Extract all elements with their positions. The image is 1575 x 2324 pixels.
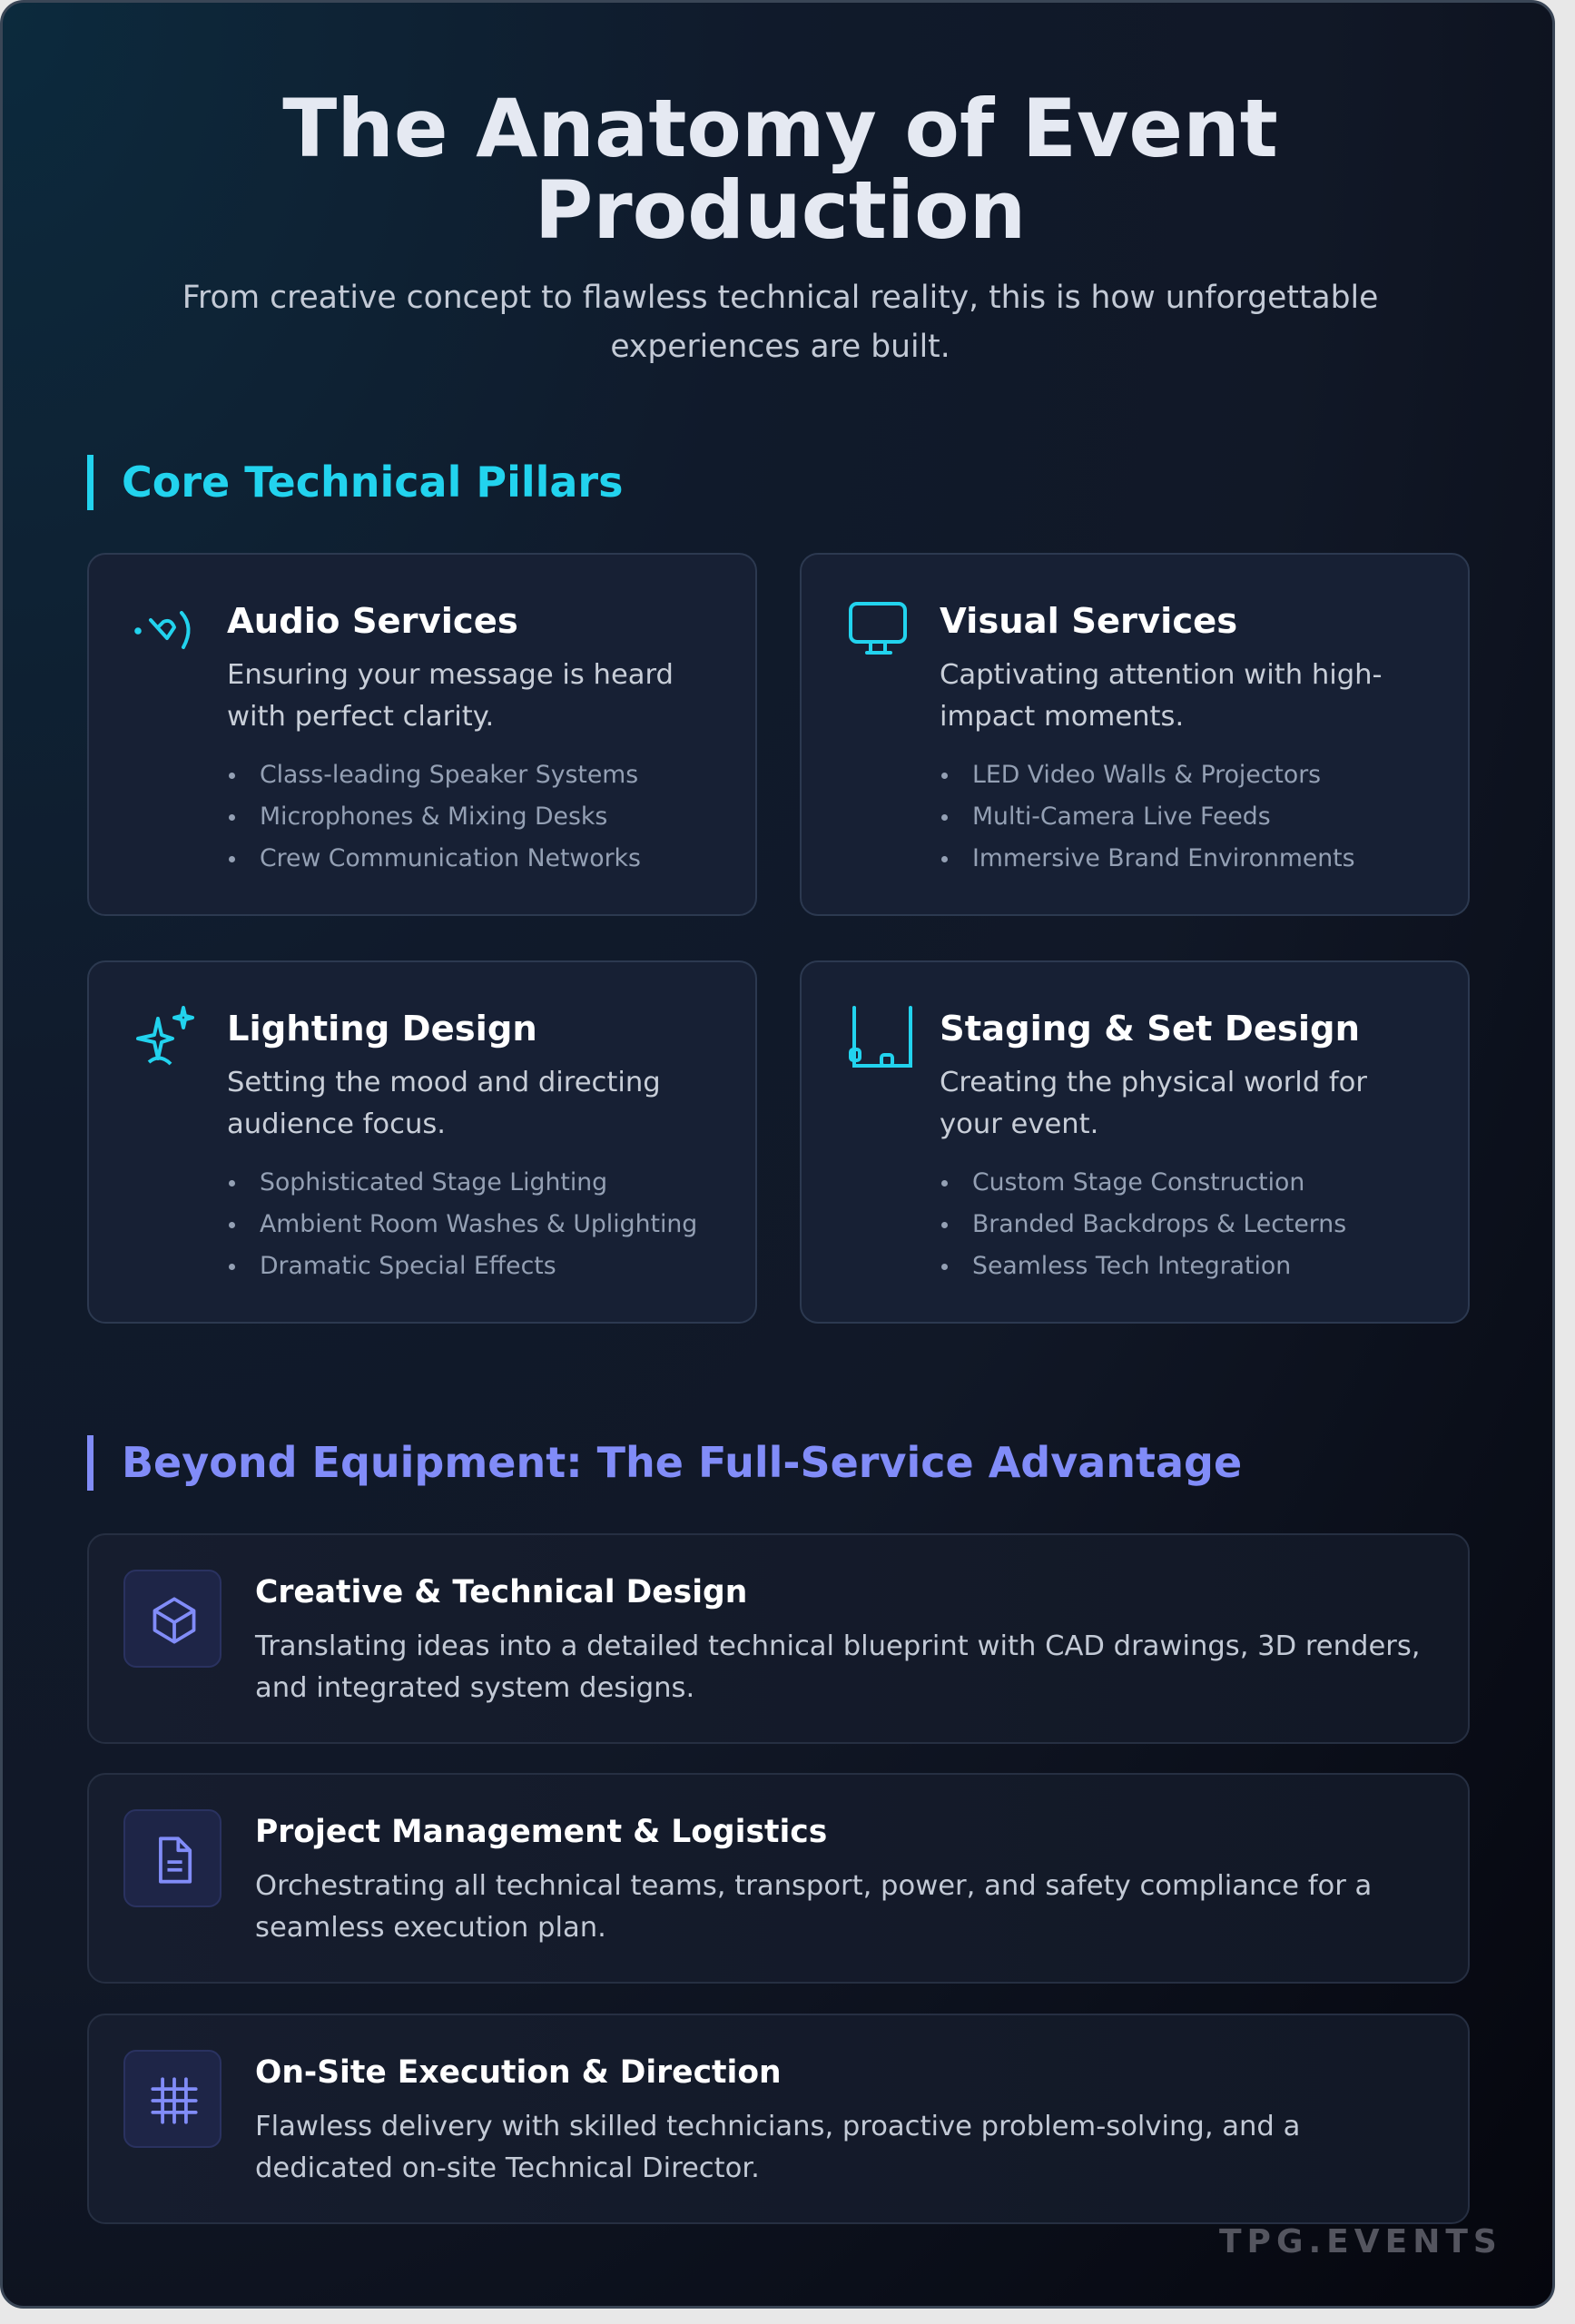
subtitle: From creative concept to flawless technical reality, this is how unforgettable experiences are built. <box>182 280 1378 365</box>
panel: project management: Project Management & Logistics <box>255 1814 827 1850</box>
icon: cube <box>123 1570 221 1668</box>
panel: lighting design: Dramatic Special Effects <box>260 1252 556 1280</box>
panel: visual services: Captivating attention with high-impact moments. <box>940 659 1383 733</box>
panel: staging & set design: Branded Backdrops & Lecterns <box>972 1210 1346 1238</box>
panel: on-site execution <box>87 2014 1470 2224</box>
panel: on-site execution: Flawless delivery with skilled technicians, proactive problem-solving, and a dedicated on-site Technical Director. <box>255 2111 1300 2184</box>
panel: staging & set design: Seamless Tech Integration <box>972 1252 1291 1280</box>
panel: lighting design: Ambient Room Washes & Uplighting <box>260 1210 697 1238</box>
panel: creative & technical design <box>87 1533 1470 1744</box>
icon: sparkles <box>136 1006 194 1066</box>
title <box>282 82 1278 257</box>
title: Production <box>535 163 1026 257</box>
panel: staging & set design: Staging & Set Design <box>940 1009 1360 1049</box>
icon: grid <box>123 2050 221 2148</box>
panel: lighting design: Setting the mood and directing audience focus. <box>227 1067 661 1140</box>
panel: staging & set design <box>800 960 1470 1324</box>
panel: lighting design: Sophisticated Stage Lighting <box>260 1168 607 1196</box>
panel: visual services <box>800 553 1470 916</box>
icon: document <box>123 1809 221 1907</box>
panel: audio services: Class-leading Speaker Systems <box>260 761 638 789</box>
panel: staging & set design: Creating the physical world for your event. <box>940 1067 1367 1140</box>
heading: core technical pillars: Core Technical Pillars <box>122 458 623 507</box>
title: The Anatomy of Event <box>282 82 1278 175</box>
panel: lighting design: Lighting Design <box>227 1009 537 1049</box>
panel: visual services: Visual Services <box>940 601 1237 642</box>
panel: staging & set design: Custom Stage Construction <box>972 1168 1304 1196</box>
heading: full-service advantage: Beyond Equipment: The Full-Service Advantage <box>122 1438 1242 1487</box>
panel: audio services <box>87 553 757 916</box>
panel: audio services: Crew Communication Networks <box>260 844 641 872</box>
panel: project management <box>87 1773 1470 1984</box>
panel: visual services: Immersive Brand Environments <box>972 844 1355 872</box>
icon: monitor <box>849 602 907 655</box>
panel: lighting design <box>87 960 757 1324</box>
panel: visual services: Multi-Camera Live Feeds <box>972 803 1271 831</box>
footer brand: TPG.EVENTS <box>1219 2223 1502 2260</box>
panel: audio services: Microphones & Mixing Desks <box>260 803 607 831</box>
panel: audio services: Ensuring your message is heard with perfect clarity. <box>227 659 674 733</box>
icon: speaker <box>134 610 191 650</box>
panel: creative & technical design: Translating ideas into a detailed technical blueprint with CAD drawings, 3D renders, and integrated system designs. <box>255 1630 1421 1704</box>
icon: stage <box>849 1006 912 1068</box>
panel: audio services: Audio Services <box>227 601 518 642</box>
panel: creative & technical design: Creative & Technical Design <box>255 1574 747 1610</box>
panel: visual services: LED Video Walls & Projectors <box>972 761 1321 789</box>
panel: on-site execution: On-Site Execution & Direction <box>255 2054 782 2091</box>
panel: project management: Orchestrating all technical teams, transport, power, and safety compliance for a seamless execution plan. <box>255 1870 1372 1944</box>
